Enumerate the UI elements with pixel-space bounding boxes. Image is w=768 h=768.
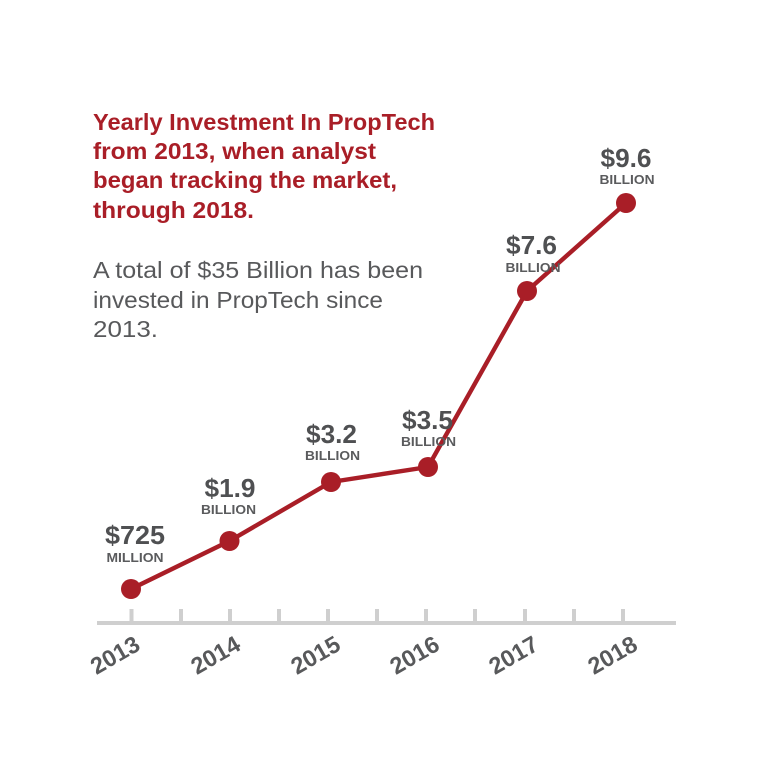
value label: 2014: BILLION (201, 502, 256, 517)
value label: 2018: $9.6 (600, 143, 652, 173)
value label: 2015: BILLION (305, 448, 360, 463)
x axis (97, 609, 676, 623)
year labels (86, 631, 642, 679)
summary text: 2013. (93, 316, 158, 342)
value label: 2018: BILLION (600, 172, 654, 187)
value label: 2013: MILLION (106, 550, 164, 565)
summary text: invested in PropTech since (93, 287, 383, 313)
data points (121, 193, 636, 599)
year labels: 2017 (484, 631, 543, 679)
value label: 2017: BILLION (506, 260, 560, 275)
year labels: 2015 (286, 631, 345, 679)
summary text (93, 257, 423, 342)
value label: 2015: $3.2 (306, 419, 357, 449)
heading: from 2013, when analyst (93, 138, 376, 164)
value label: 2017: $7.6 (506, 230, 557, 260)
year labels: 2016 (385, 631, 444, 679)
value label: 2015 (305, 419, 360, 463)
year labels: 2014 (186, 631, 245, 679)
heading: began tracking the market, (93, 167, 397, 193)
value label: 2014: $1.9 (204, 473, 256, 503)
value label: 2016: BILLION (401, 434, 456, 449)
value label: 2018 (600, 143, 654, 187)
value label: 2016 (401, 405, 456, 449)
value label: 2014 (201, 473, 256, 517)
heading: Yearly Investment In PropTech (93, 109, 435, 135)
year labels: 2018 (583, 631, 642, 679)
year labels: 2013 (86, 631, 144, 679)
data line (131, 203, 626, 589)
value label: 2013 (105, 520, 165, 565)
heading: through 2018. (93, 197, 254, 223)
heading (93, 109, 435, 223)
summary text: A total of $35 Billion has been (93, 257, 423, 283)
value label: 2013: $725 (105, 520, 165, 550)
value label: 2016: $3.5 (402, 405, 453, 435)
value label: 2017 (506, 230, 560, 275)
